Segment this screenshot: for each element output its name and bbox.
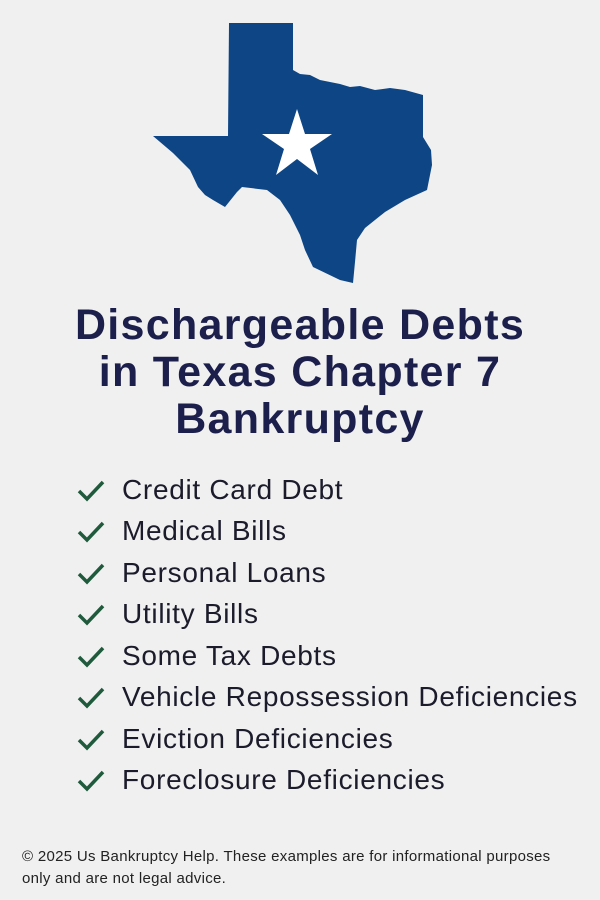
title: in Texas Chapter 7 [99, 348, 501, 396]
title [75, 301, 525, 443]
icon: texas map [153, 23, 432, 283]
item: Foreclosure Deficiencies [122, 764, 445, 795]
item: Vehicle Repossession Deficiencies [122, 681, 578, 712]
footer [22, 848, 550, 887]
footer: only and are not legal advice. [22, 870, 226, 887]
item: Credit Card Debt [122, 474, 343, 505]
item: Eviction Deficiencies [122, 723, 393, 754]
item: Medical Bills [122, 515, 287, 546]
checklist [78, 474, 578, 795]
title: Bankruptcy [175, 395, 425, 443]
footer: © 2025 Us Bankruptcy Help. These examples are for informational purposes [22, 848, 550, 865]
item: Personal Loans [122, 557, 326, 588]
item: Some Tax Debts [122, 640, 337, 671]
title: Dischargeable Debts [75, 301, 525, 349]
item: Utility Bills [122, 598, 259, 629]
